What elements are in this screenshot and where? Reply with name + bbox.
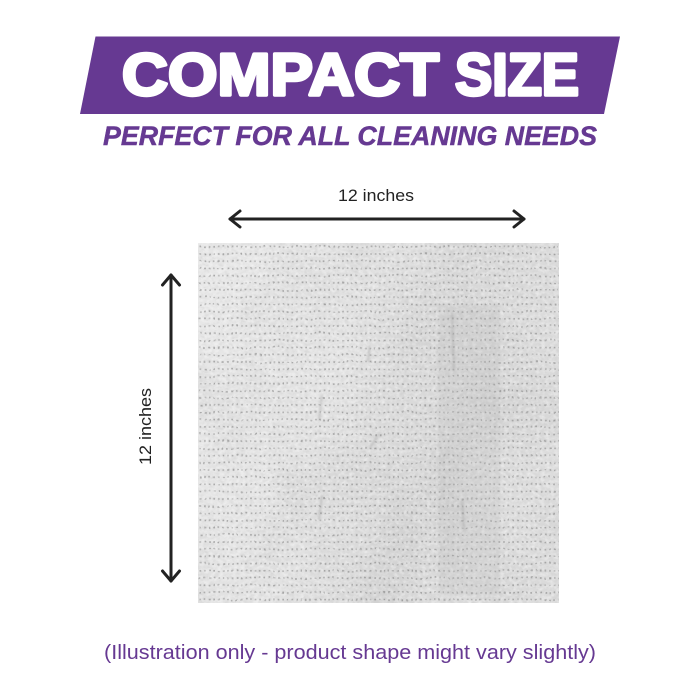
disclaimer note: (Illustration only - product shape might vary slightly) [104,641,596,664]
arrow: width [230,211,524,227]
arrow: height [162,275,180,581]
title banner [80,36,620,114]
title text: SIZE [455,42,579,108]
title text [122,42,579,108]
height label: 12 inches [137,388,155,465]
title text: COMPACT [122,42,439,108]
banner background [80,36,620,114]
width label: 12 inches [338,187,414,205]
cleaning cloth [198,243,559,603]
subtitle: PERFECT FOR ALL CLEANING NEEDS [103,121,597,151]
